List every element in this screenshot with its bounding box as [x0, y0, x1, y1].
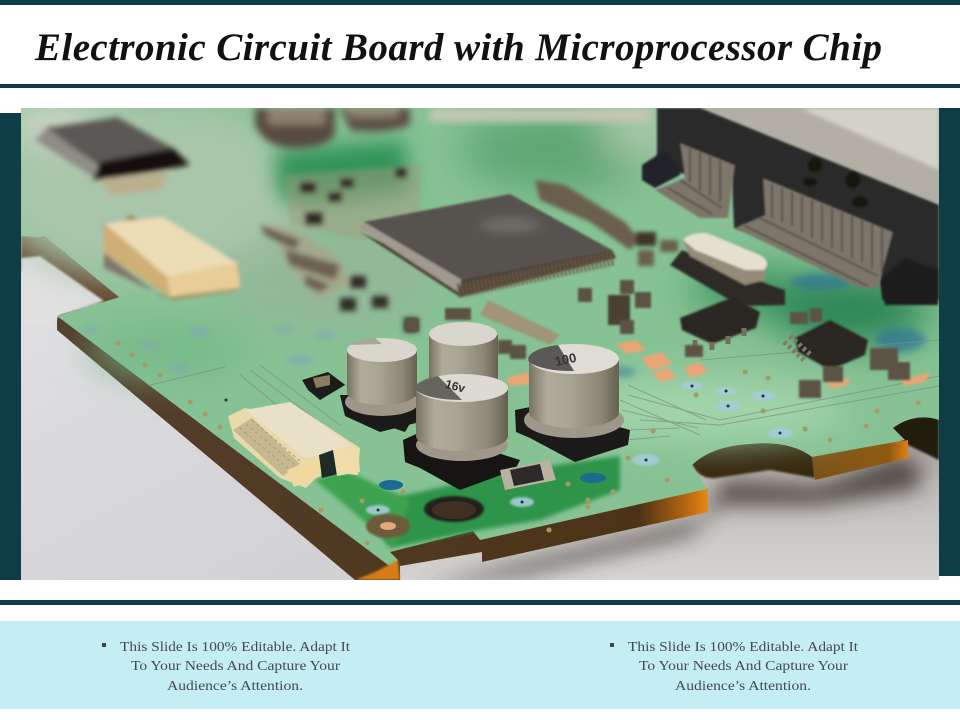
capacitor A	[340, 338, 428, 432]
table through notch	[21, 256, 104, 325]
mounting hole	[424, 496, 484, 522]
footer text left: This Slide Is 100% Editable. Adapt It	[120, 640, 350, 655]
top capacitors out of focus	[255, 108, 410, 148]
board colour washes	[0, 100, 930, 440]
footer text right: This Slide Is 100% Editable. Adapt It	[628, 640, 858, 655]
left rail	[0, 113, 21, 580]
footer text left	[102, 640, 350, 694]
green area left of capacitors	[315, 470, 410, 545]
deep green copper area	[360, 456, 620, 548]
copper pad via	[366, 514, 410, 538]
via centres	[226, 386, 780, 510]
footer text right: To Your Needs And Capture Your	[639, 659, 848, 674]
green area top centre	[275, 140, 410, 205]
copper pads	[506, 340, 930, 388]
footer text right	[610, 640, 858, 694]
small parts	[405, 280, 910, 398]
top bar	[0, 0, 960, 5]
blurred components	[260, 165, 420, 332]
capacitor B	[429, 322, 498, 385]
chip pins front	[458, 258, 614, 291]
connector clip right	[880, 258, 938, 305]
chip: blurred top-left IC	[35, 117, 190, 195]
bottom divider	[0, 600, 960, 605]
pin group right	[735, 178, 893, 288]
far via spots	[81, 221, 335, 372]
footer text right: Audience’s Attention.	[675, 679, 811, 694]
pin group left	[655, 143, 735, 218]
capacitor D base	[515, 405, 630, 462]
cream ribbon connector blurred	[104, 215, 240, 300]
right notch wall	[893, 417, 939, 461]
small SOIC chip	[784, 320, 868, 370]
blue via dark	[580, 473, 606, 483]
white FFC connector	[228, 402, 360, 488]
tab orange corner	[812, 440, 908, 480]
footer text left: To Your Needs And Capture Your	[131, 659, 340, 674]
capacitor D marking: 100	[553, 350, 578, 369]
vias	[366, 382, 793, 515]
orange board corner	[355, 560, 400, 580]
SOT chip	[680, 297, 760, 350]
SMD resistor	[500, 460, 556, 490]
crystal oscillator	[670, 233, 785, 306]
capacitor C	[416, 374, 508, 461]
table surface right	[456, 418, 939, 580]
title: Electronic Circuit Board with Microprocessor Chip	[34, 26, 882, 69]
panel: circuit board photo	[0, 100, 939, 590]
connector clip left	[642, 150, 680, 188]
title underline	[0, 84, 960, 88]
capacitor C marking: 16v	[444, 377, 467, 396]
right rail	[939, 108, 960, 576]
footer text left: Audience’s Attention.	[167, 679, 303, 694]
table surface	[21, 250, 413, 580]
board shadow	[410, 455, 925, 590]
board top surface	[21, 108, 939, 568]
sockets	[803, 158, 868, 207]
circuit traces	[150, 340, 939, 440]
black connector housing	[642, 108, 939, 305]
capacitor C base	[403, 430, 520, 490]
capacitor D	[524, 344, 624, 438]
panel: footer band	[0, 621, 960, 709]
solder dots	[118, 343, 918, 543]
board underside edge	[21, 236, 939, 580]
microprocessor chip	[360, 194, 616, 297]
hole in board left	[21, 235, 120, 312]
blue vias right	[604, 274, 925, 376]
resistor row	[535, 180, 678, 266]
dark cut-out wall	[685, 440, 815, 478]
top-edge pale strip	[430, 108, 650, 122]
capacitor base left black	[302, 372, 418, 432]
